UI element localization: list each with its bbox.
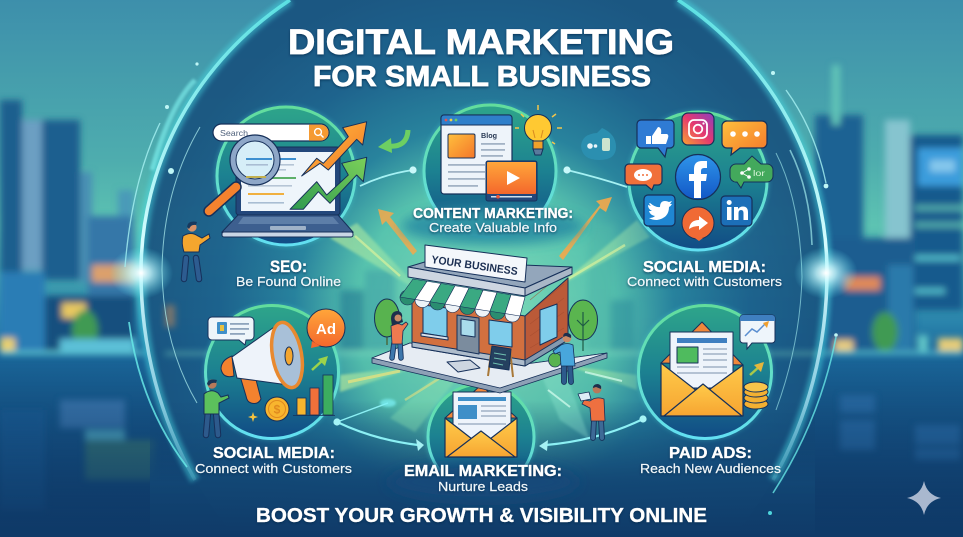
icon: envelope with newsletter — [445, 385, 517, 457]
label: social media left — [195, 445, 353, 476]
label: email marketing — [404, 463, 562, 494]
person: man in blue — [553, 333, 575, 382]
icon: search bar — [213, 124, 329, 141]
label: paid ads: Reach New Audiences — [640, 461, 782, 476]
platform — [372, 343, 607, 393]
label backdrop — [401, 207, 585, 245]
roof — [408, 261, 572, 296]
icon: small arrow — [750, 362, 764, 375]
windows and door — [421, 304, 557, 372]
panel: content marketing — [401, 103, 585, 245]
icon: small arrow and star — [248, 356, 328, 422]
icon: chart bubble — [740, 315, 775, 349]
title — [288, 23, 674, 93]
label backdrop — [388, 463, 578, 501]
icon: laptop with search results — [222, 147, 353, 237]
icon: green share bubble — [730, 156, 773, 188]
icon: thumbs up — [637, 120, 674, 157]
icon: facebook — [676, 154, 720, 200]
icon: rising arrows — [290, 122, 367, 209]
title: FOR SMALL BUSINESS — [313, 61, 651, 93]
title: DIGITAL MARKETING — [288, 23, 674, 62]
glowing dome — [141, 0, 827, 537]
icon: coin stack — [744, 382, 768, 409]
footer tagline: BOOST YOUR GROWTH & VISIBILITY ONLINE — [256, 504, 707, 527]
panel: email marketing — [388, 382, 578, 501]
icon: ad speech bubble — [208, 317, 254, 345]
icon: light bulb — [515, 105, 562, 155]
icon: blog page — [441, 115, 512, 194]
icon: blog page: Blog — [481, 131, 497, 140]
person: man pointing — [182, 222, 210, 279]
label: email marketing: Nurture Leads — [438, 479, 529, 494]
person: man with tablet — [578, 384, 605, 438]
label: social media right — [627, 259, 783, 289]
label: social media left: Connect with Customers — [195, 461, 353, 476]
icon: video player — [486, 161, 537, 201]
tree right — [568, 300, 598, 351]
sign — [425, 245, 527, 282]
icon: magnifying glass — [209, 135, 280, 211]
icon: search bar: Search — [220, 129, 248, 138]
person: man in green — [204, 379, 229, 435]
shrub — [548, 353, 562, 367]
icon: small chat bubble — [625, 164, 662, 190]
label: SEO: Be Found Online — [236, 274, 341, 289]
panel: social media right — [625, 110, 773, 252]
person: woman — [391, 311, 408, 358]
label: SEO: SEO: — [270, 258, 307, 276]
glowing outer arcs — [109, 0, 858, 515]
label: paid ads — [640, 445, 782, 476]
icon: sparkle watermark — [907, 481, 941, 515]
icon: coin: $ — [274, 402, 281, 416]
icon: bar chart — [293, 375, 335, 416]
icon: orange chat bubble — [722, 121, 767, 155]
storefront: your business — [372, 245, 607, 438]
icon: floating chat bubble — [581, 128, 616, 160]
light rays from storefront to each service — [330, 220, 650, 440]
awning — [400, 279, 525, 322]
icon: megaphone — [221, 320, 307, 404]
panel: paid ads — [637, 304, 775, 440]
icon: green share bubble: lor — [753, 169, 765, 178]
label: social media right: SOCIAL MEDIA: — [643, 259, 766, 276]
connector lines and arrows — [333, 130, 647, 451]
icon: coin — [265, 397, 289, 421]
label: content marketing — [413, 206, 573, 235]
sign: YOUR BUSINESS — [431, 254, 518, 278]
panel: SEO — [182, 105, 367, 279]
label: social media right: Connect with Customers — [627, 274, 783, 289]
label: content marketing: Create Valuable Info — [429, 220, 557, 235]
icon: instagram — [682, 113, 714, 145]
tree left — [374, 299, 400, 345]
icon: twitter — [644, 195, 675, 226]
building walls — [412, 272, 568, 366]
panel: social media left with megaphone — [204, 304, 345, 440]
label: content marketing: CONTENT MARKETING: — [413, 206, 573, 222]
label: paid ads: PAID ADS: — [669, 445, 752, 462]
label: social media left: SOCIAL MEDIA: — [213, 445, 335, 462]
icon: Ad badge — [307, 309, 345, 348]
icon: linkedin — [721, 196, 752, 226]
icon: Ad badge: Ad — [316, 321, 336, 338]
a-board sign — [488, 346, 513, 377]
label: email marketing: EMAIL MARKETING: — [404, 463, 562, 480]
label: SEO — [236, 258, 341, 289]
icon: share bubble — [682, 207, 714, 241]
icon: open envelope — [661, 322, 743, 416]
